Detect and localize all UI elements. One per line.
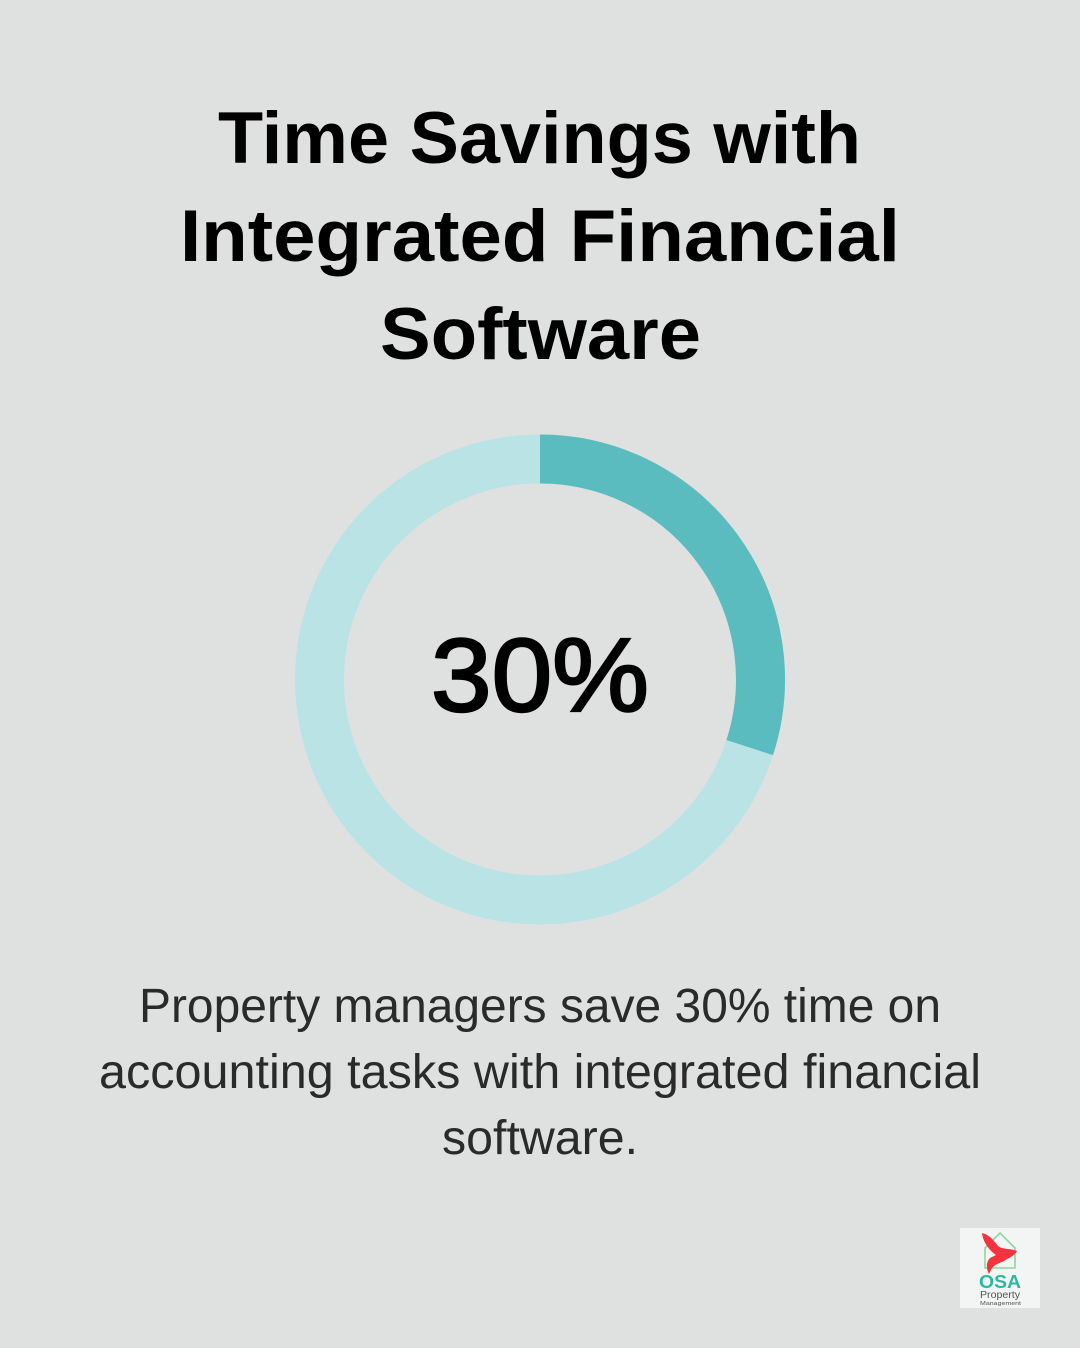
donut chart: 30% — [320, 459, 760, 900]
description text: software. — [442, 1112, 638, 1165]
title: Integrated Financial — [180, 196, 900, 277]
ring value segment — [540, 459, 760, 748]
icon: red bird — [982, 1233, 1017, 1274]
description text: Property managers save 30% time on — [139, 980, 941, 1033]
description text: accounting tasks with integrated financial — [99, 1046, 981, 1099]
title — [180, 98, 900, 375]
logo tagline: Management — [980, 1301, 1022, 1307]
title: Time Savings with — [218, 98, 861, 179]
logo background — [960, 1228, 1040, 1308]
description text — [99, 980, 981, 1165]
logo wordmark: OSA — [979, 1272, 1021, 1292]
icon: house outline — [985, 1233, 1015, 1268]
title: Software — [380, 294, 701, 375]
ring track — [320, 459, 760, 900]
logo: OSA Property Management — [960, 1228, 1040, 1308]
logo subtitle: Property — [980, 1290, 1020, 1301]
center value: 30% — [431, 618, 649, 734]
